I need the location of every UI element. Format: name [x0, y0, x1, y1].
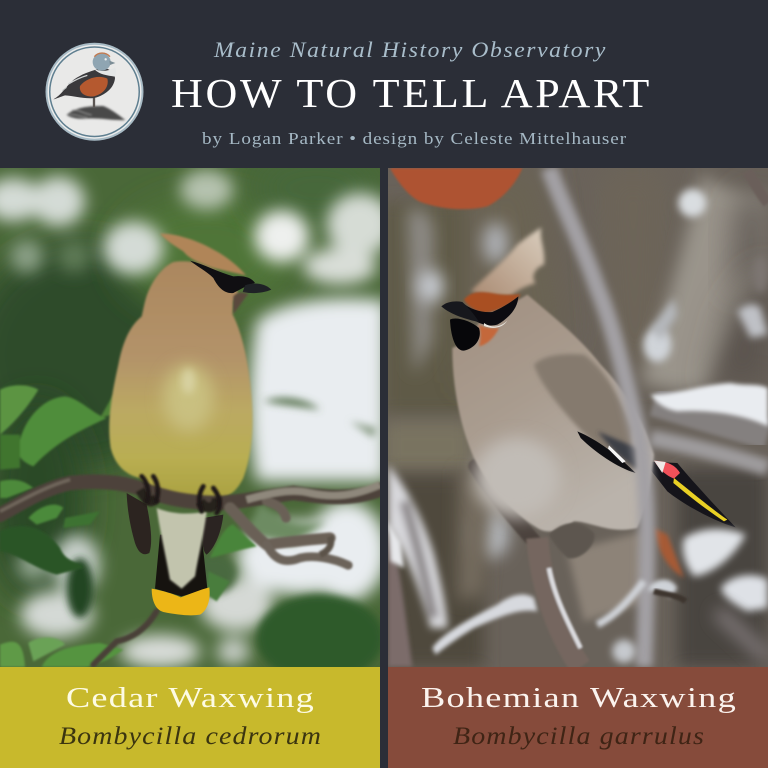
- title: HOW TO TELL APART: [171, 70, 652, 116]
- branch: [0, 476, 380, 565]
- organisation name: Maine Natural History Observatory: [213, 37, 607, 62]
- bird foot: [549, 523, 594, 558]
- credits: by Logan Parker • design by Celeste Mittelhauser: [202, 129, 627, 148]
- panel: bohemian waxwing photo: [384, 168, 768, 667]
- photo background: blurred trees and snow: [384, 168, 768, 667]
- cedar scientific name: Bombycilla cedrorum: [59, 723, 322, 750]
- icon: duck ground mound: [67, 106, 125, 120]
- leaves: [0, 385, 257, 667]
- panel: cedar waxwing photo: [0, 148, 393, 681]
- bird eye mask: [190, 261, 255, 293]
- bird throat: [233, 293, 248, 314]
- bird crest: [160, 234, 246, 275]
- logo: harlequin duck badge: [46, 43, 144, 141]
- bird face mask: [441, 296, 518, 351]
- bird: bohemian waxwing: [441, 227, 736, 558]
- icon: duck legs: [90, 97, 97, 107]
- foreground twigs and snow: [549, 168, 768, 667]
- photo background: blurred green foliage: [0, 148, 393, 681]
- cedar common name: Cedar Waxwing: [66, 682, 315, 714]
- bohemian scientific name: Bombycilla garrulus: [453, 723, 705, 750]
- perch branch: [476, 466, 581, 667]
- icon: duck head: [93, 53, 115, 71]
- secondary twig at bottom: [93, 611, 157, 665]
- fruit: crab apple: [390, 168, 522, 209]
- bird wing: [534, 354, 637, 473]
- bird tail: [152, 508, 210, 615]
- header band: [0, 0, 768, 168]
- bird beak: [243, 283, 271, 293]
- bird wing tip: [127, 493, 151, 554]
- snowy left branches: [388, 465, 447, 628]
- bird tail: [644, 461, 736, 527]
- bird: cedar waxwing: [109, 234, 271, 615]
- icon: duck body: [53, 67, 116, 99]
- bird feet: [142, 476, 220, 513]
- bird body: [109, 261, 252, 501]
- bird crest: [464, 227, 544, 313]
- panel: bohemian waxwing label: [388, 667, 768, 768]
- panel: cedar waxwing label: [0, 667, 380, 768]
- bohemian common name: Bohemian Waxwing: [421, 682, 737, 714]
- bird body: [452, 295, 654, 531]
